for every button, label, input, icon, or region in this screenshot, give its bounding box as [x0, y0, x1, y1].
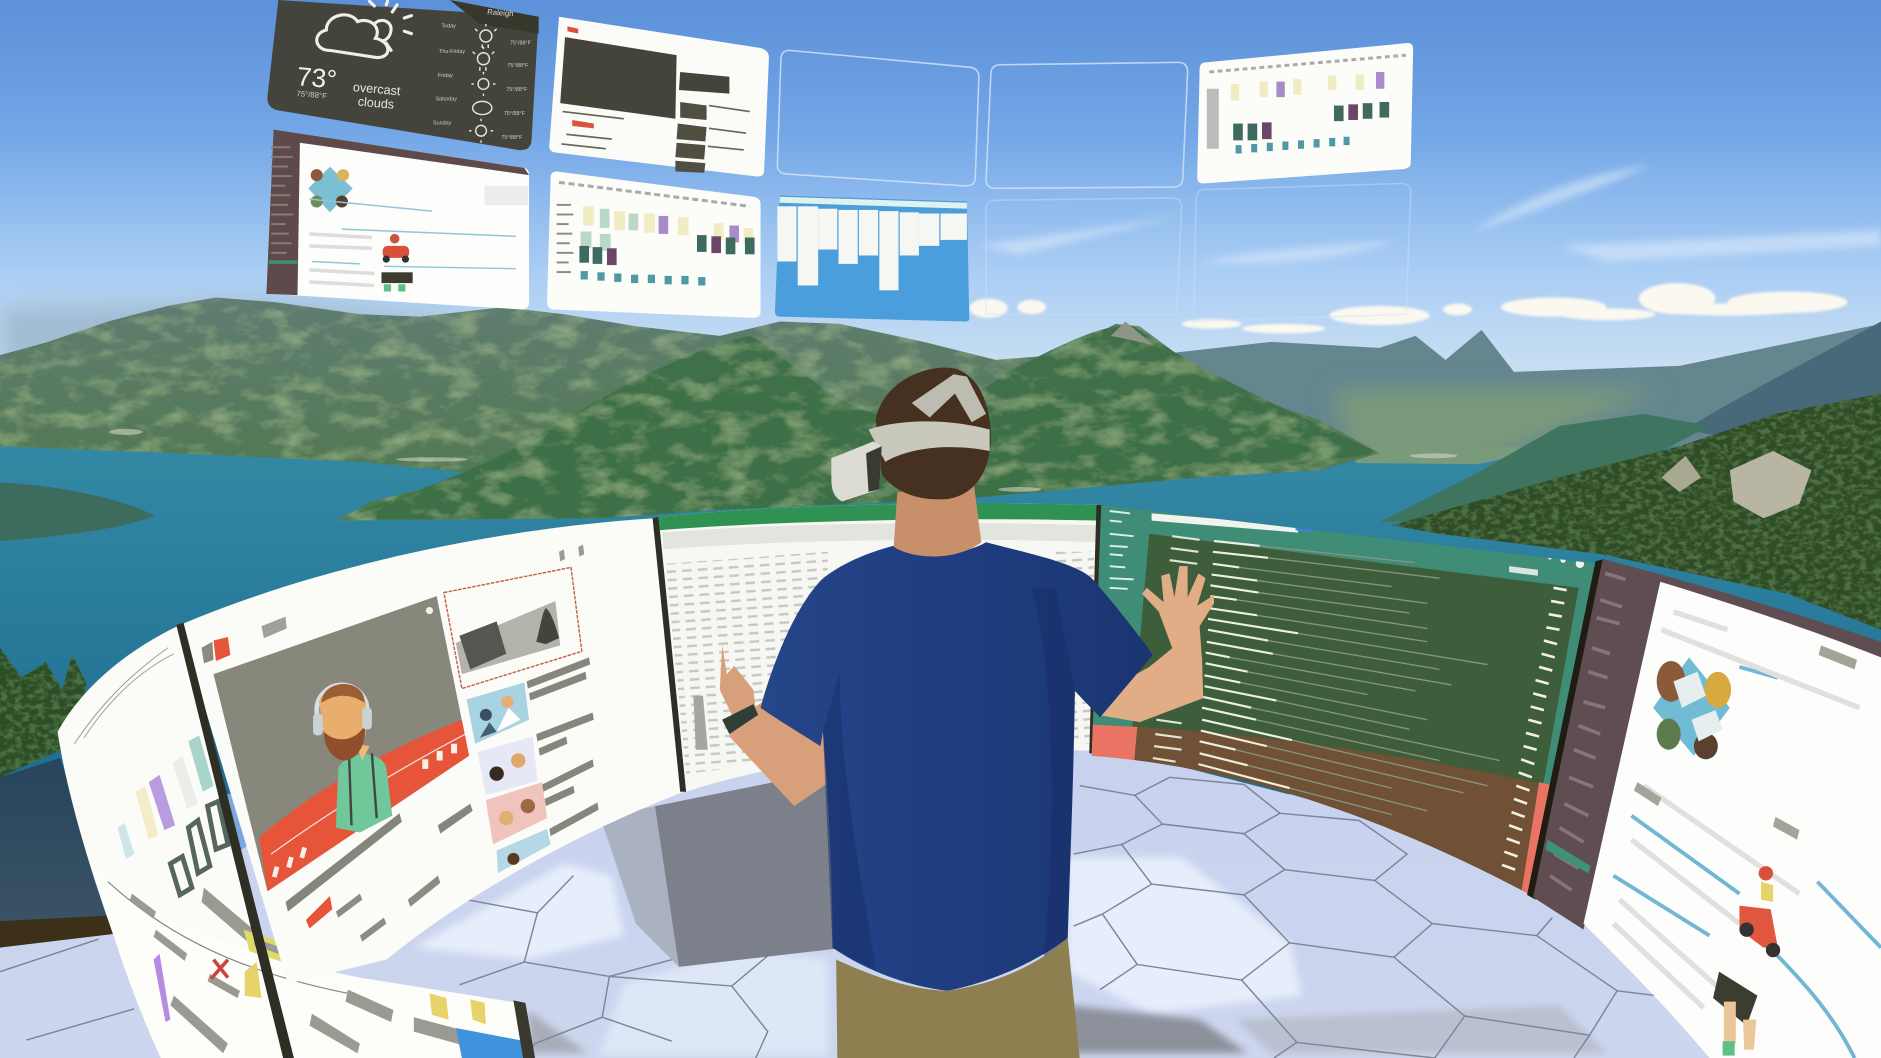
sunlit patches: [414, 858, 1302, 1056]
thumbnail list: [467, 683, 551, 873]
left sender column: [1153, 536, 1200, 762]
featured video thumbnail: [444, 567, 582, 689]
valley right: [1332, 390, 1661, 463]
trees left: [0, 648, 86, 777]
floating panel: blue kanban board: [775, 196, 969, 321]
forecast list: 75°/88°F: [501, 135, 523, 141]
email sender white bars: [1198, 541, 1298, 788]
screen: green email list: [1086, 505, 1598, 906]
black divider: [176, 623, 294, 1058]
salmon accent: [1092, 724, 1138, 760]
keyboard illustration: [381, 272, 413, 283]
team illustration: [1653, 657, 1731, 759]
plum sidebar: [1533, 559, 1665, 930]
distant mountains right: [1164, 324, 1881, 480]
email list brown area: [1128, 727, 1550, 900]
current temperature: 73°: [296, 61, 338, 95]
weather cloud icon: [317, 1, 411, 58]
search bar: [1152, 513, 1298, 533]
video frame: [214, 596, 469, 891]
head hair: [876, 368, 991, 499]
shirt: [761, 542, 1153, 991]
sky: [0, 0, 1881, 408]
forecast list: [433, 24, 532, 141]
screen: spreadsheet: [659, 504, 1104, 792]
screen: leftmost curved panel: [58, 625, 288, 1058]
forecast list: Today: [441, 24, 456, 30]
main mountains: [0, 297, 1380, 521]
mid hill right: [1380, 414, 1709, 522]
right blue ridge: [1685, 321, 1881, 438]
subscribe button: [306, 896, 332, 928]
lake: [0, 446, 1881, 794]
thumbnail titles: [527, 657, 599, 836]
forest right: [1392, 393, 1881, 630]
forecast list: 75°/88°F: [507, 63, 529, 69]
shirt shading: [823, 588, 1075, 969]
forecast list: Sunday: [433, 121, 452, 127]
floating panel: spreadsheet of cards: [547, 172, 761, 318]
pants: [836, 938, 1080, 1058]
dark card icons: [170, 801, 228, 895]
brown ledge: [0, 915, 120, 948]
divider right: [653, 517, 686, 792]
right arm and hand: [1098, 566, 1214, 722]
pastel card icons: [118, 735, 214, 859]
page logo: [202, 637, 230, 663]
player controls: [272, 744, 457, 878]
screen: lower tier panel: [94, 866, 535, 1058]
far hazy ridge left: [0, 300, 504, 366]
red lower band: [259, 720, 469, 891]
forecast list: Thu-Friday: [439, 49, 465, 55]
left forearm and hand: [720, 645, 833, 806]
forecast icons: [469, 24, 497, 143]
temperature range: 75°/88°F: [296, 89, 327, 101]
floor: [0, 744, 1881, 1058]
hexagon tile lines: [0, 777, 1657, 1058]
forecast list: 75°/88°F: [506, 87, 528, 93]
outline panel: empty slots: [777, 50, 1411, 321]
foreground ridge: [338, 326, 1380, 519]
city name: Raleigh: [487, 7, 514, 18]
wispy clouds: [978, 166, 1881, 263]
neck: [894, 486, 981, 556]
spreadsheet cells: [666, 552, 828, 774]
team illustration: [308, 167, 353, 212]
email subject grey lines: [1230, 546, 1500, 814]
blue heading lines: [1613, 667, 1881, 1058]
wristwatch: [722, 704, 758, 734]
plum top band: [1603, 559, 1881, 657]
condition: overcast: [352, 80, 402, 98]
black divider: [1527, 559, 1604, 900]
person: [720, 368, 1214, 1058]
headset top strap: [912, 374, 986, 422]
floating panel: weather: [267, 0, 539, 150]
forecast list: 75°/88°F: [504, 111, 526, 117]
sidebar items: [1550, 573, 1625, 890]
screen: right document: [1533, 559, 1881, 1058]
date column: [1502, 588, 1567, 870]
keyboard illustration: [1713, 972, 1757, 1056]
scooter illustration: [383, 234, 409, 263]
rock outcrops: [1661, 451, 1811, 518]
headset visor: [831, 441, 882, 501]
forecast list: Friday: [438, 73, 453, 79]
divider right: [1089, 505, 1104, 753]
forecast list: Saturday: [435, 97, 457, 103]
mountain peak rock: [1111, 321, 1154, 345]
white page: [1583, 582, 1881, 1058]
right valley shore: [1356, 446, 1560, 464]
sidebar menu: [1110, 511, 1134, 589]
condition second line: clouds: [357, 95, 395, 112]
screen: video page with avatar: [176, 517, 686, 1058]
avatar person: [313, 684, 392, 832]
top actions: [1548, 558, 1584, 568]
floating panel: spreadsheet top right: [1197, 43, 1413, 184]
left dark wall: [0, 758, 114, 924]
floor shadow: [528, 1005, 1607, 1053]
pedestal desk: [600, 768, 846, 967]
forecast list: 75°/88°F: [510, 40, 532, 46]
floating panel: video page: [549, 17, 769, 177]
page title bars: [286, 804, 473, 912]
left island: [0, 482, 155, 541]
shoreline towns: [109, 429, 1458, 492]
email list dark area: [1128, 534, 1579, 894]
floating panel: document with sidebar: [266, 130, 529, 309]
grey text lines: [1613, 612, 1859, 1008]
headset strap: [869, 421, 990, 462]
black edge: [513, 1000, 535, 1058]
horizon clouds: [969, 283, 1847, 333]
visor lens: [866, 446, 882, 492]
scooter illustration: [1739, 866, 1780, 957]
